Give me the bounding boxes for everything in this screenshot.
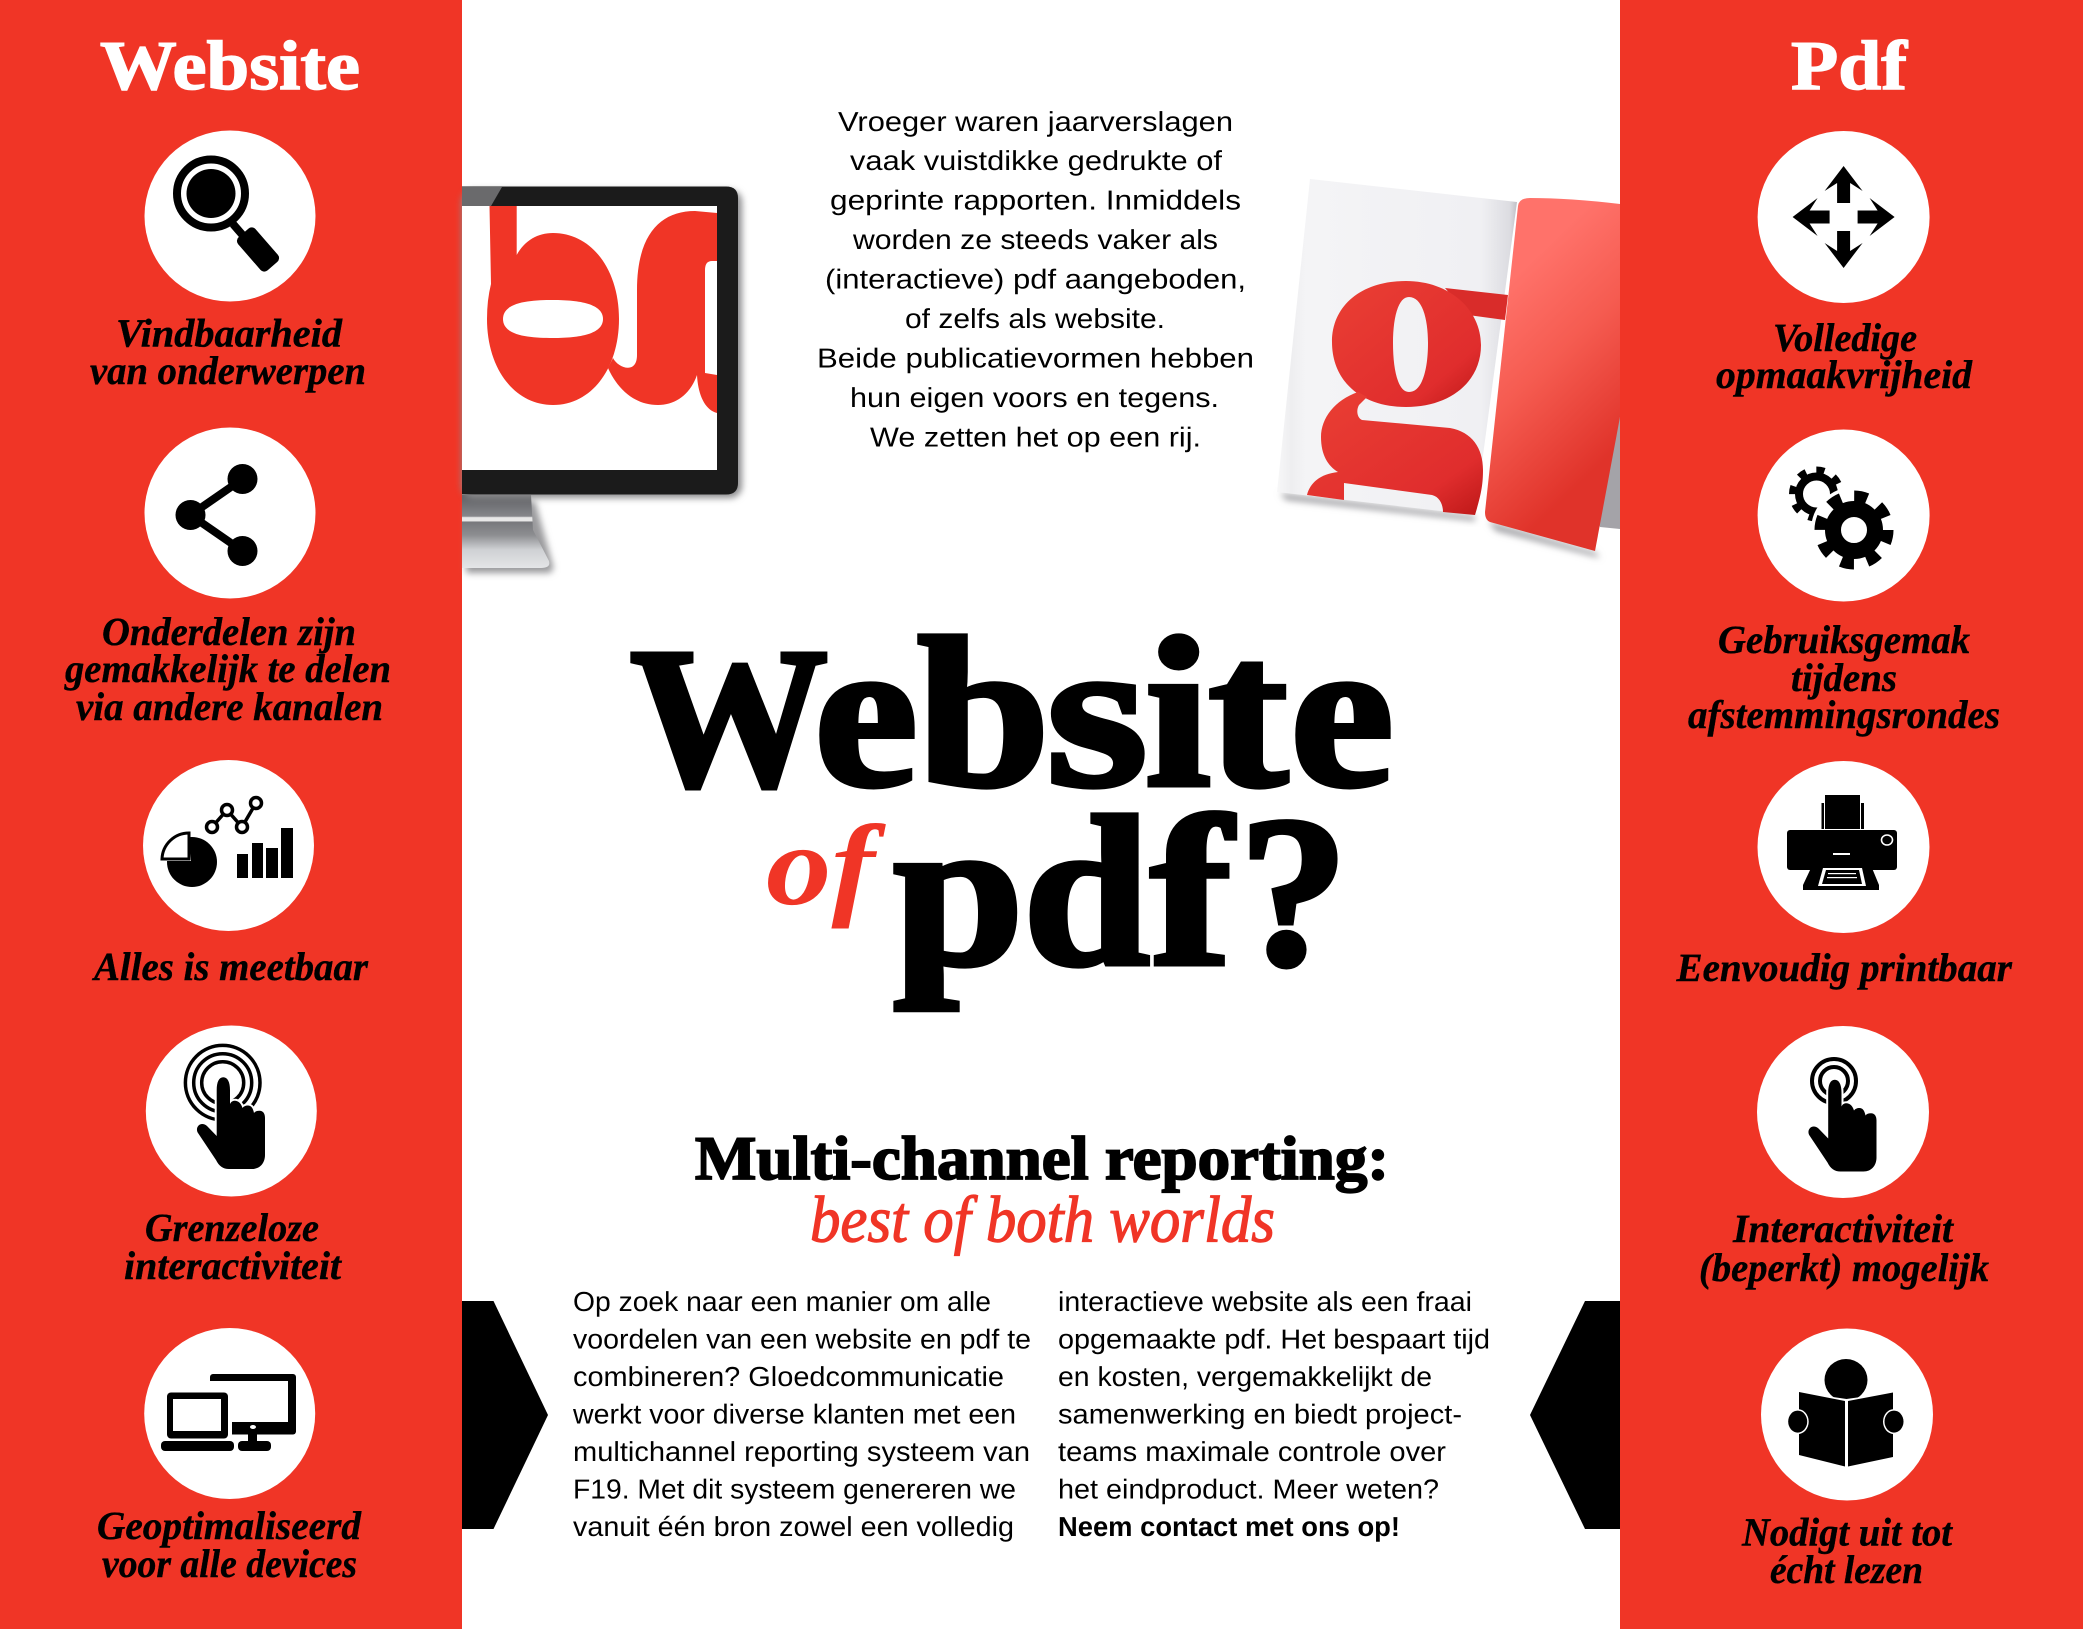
intro text: geprinte rapporten. Inmiddels <box>830 184 1241 216</box>
icon: reader <box>1787 1359 1905 1466</box>
label: afstemmingsrondes <box>1688 692 2000 737</box>
icon: four arrows <box>1793 166 1895 268</box>
arrow: right chevron <box>1530 1301 1620 1529</box>
title line: Website: s <box>1046 593 1148 832</box>
heading: Pdf: Pdf <box>1791 28 1908 105</box>
item: beperkte interactiviteit <box>1699 1026 1989 1290</box>
label <box>1716 315 1973 397</box>
label: tijdens <box>1791 655 1897 700</box>
label: (beperkt) mogelijk <box>1699 1245 1989 1290</box>
image: desktop monitor <box>462 186 742 573</box>
label <box>1699 1206 1989 1290</box>
item: printbaar <box>1676 761 2012 990</box>
body text: column 1: F19. Met dit systeem genereren we <box>573 1474 1016 1504</box>
subheading <box>695 1125 1389 1256</box>
intro text: Beide publicatievormen hebben <box>817 342 1254 374</box>
arrow: left chevron <box>462 1301 548 1529</box>
label <box>124 1205 343 1288</box>
panel: pdf <box>1620 0 2083 1629</box>
icon: share <box>176 464 258 566</box>
label: gemakkelijk te delen <box>64 646 391 691</box>
title line: Website: e <box>1290 593 1394 832</box>
label: interactiviteit <box>124 1243 343 1288</box>
title line: pdf?: f <box>1150 772 1235 1011</box>
title line: pdf?: d <box>1023 772 1150 1011</box>
item: lezen <box>1741 1328 1954 1592</box>
panel: website <box>0 0 462 1629</box>
icon: gears <box>1793 470 1897 573</box>
heading: Website: Website <box>100 28 360 105</box>
body text: column 2: samenwerking en biedt project- <box>1058 1398 1462 1430</box>
title line: Website: t <box>1208 593 1288 832</box>
title line: Website: W <box>630 608 828 829</box>
title line: Website: b <box>917 593 1050 832</box>
label: Interactiviteit <box>1732 1206 1955 1251</box>
icon: touch hand <box>1808 1059 1876 1172</box>
intro text: worden ze steeds vaker als <box>852 224 1218 255</box>
body text: column 2: interactieve website als een fraai <box>1058 1286 1472 1317</box>
body text: column 1 <box>572 1286 1031 1542</box>
body text: column 2: en kosten, vergemakkelijkt de <box>1058 1361 1432 1392</box>
main title <box>630 593 1394 1011</box>
body text: column 2 <box>1058 1286 1490 1542</box>
label: Geoptimaliseerd <box>97 1503 362 1548</box>
image: open magazine <box>1277 179 1620 558</box>
item: devices <box>97 1328 362 1586</box>
label: Alles is meetbaar <box>91 944 368 989</box>
label: Onderdelen zijn <box>102 609 356 654</box>
intro text <box>817 106 1254 452</box>
letter g on page <box>1307 281 1508 515</box>
label <box>64 609 391 729</box>
body text: column 2: opgemaakte pdf. Het bespaart tijd <box>1058 1324 1490 1354</box>
subheading accent: best of both worlds <box>810 1184 1275 1256</box>
body text: column 2: Neem contact met ons op! <box>1058 1511 1400 1542</box>
title line: pdf?: p <box>893 772 1024 1011</box>
label: Gebruiksgemak <box>1718 617 1970 662</box>
label <box>97 1503 362 1586</box>
label: via andere kanalen <box>76 684 383 729</box>
intro text: hun eigen voors en tegens. <box>850 382 1219 413</box>
body text: column 1: werkt voor diverse klanten met een <box>572 1398 1016 1430</box>
label <box>90 310 366 393</box>
label: van onderwerpen <box>90 348 366 393</box>
body text: column 1: voordelen van een website en pdf te <box>573 1324 1031 1354</box>
title line: Website: i <box>1145 593 1211 832</box>
icon: charts <box>160 798 293 887</box>
label: Vindbaarheid <box>116 310 343 356</box>
body text: column 1: multichannel reporting systeem van <box>573 1436 1030 1467</box>
intro text: vaak vuistdikke gedrukte of <box>850 145 1222 176</box>
body text: column 1: combineren? Gloedcommunicatie <box>573 1361 1004 1392</box>
item: meetbaar <box>91 760 368 989</box>
item: vindbaarheid <box>90 130 366 393</box>
icon: laptop and monitor <box>161 1374 296 1451</box>
icon: printer <box>1787 795 1897 890</box>
subheading: Multi-channel reporting: <box>695 1125 1389 1193</box>
title word: of: of <box>766 802 886 929</box>
intro text: Vroeger waren jaarverslagen <box>838 106 1233 137</box>
label: Grenzeloze <box>145 1205 319 1250</box>
body text: column 1: Op zoek naar een manier om alle <box>573 1286 991 1317</box>
body text: column 2: het eindproduct. Meer weten? <box>1058 1474 1439 1504</box>
intro text: (interactieve) pdf aangeboden, <box>825 264 1246 294</box>
item: delen <box>64 428 391 729</box>
item: opmaakvrijheid <box>1716 131 1973 397</box>
label: voor alle devices <box>102 1541 357 1586</box>
intro text: of zelfs als website. <box>905 303 1165 334</box>
red letters on screen <box>487 206 717 413</box>
label: écht lezen <box>1770 1547 1923 1592</box>
label: Eenvoudig printbaar <box>1676 945 2012 990</box>
label: opmaakvrijheid <box>1716 352 1973 397</box>
label <box>1741 1510 1954 1592</box>
label <box>1688 617 2000 737</box>
item: interactiviteit <box>124 1026 343 1288</box>
label: Volledige <box>1773 315 1917 360</box>
intro text: We zetten het op een rij. <box>870 422 1201 452</box>
label: Nodigt uit tot <box>1741 1510 1954 1554</box>
icon: touch hand with rings <box>185 1045 265 1169</box>
title line: Website: e <box>814 593 918 832</box>
item: gebruiksgemak <box>1688 430 2000 737</box>
body text: column 2: teams maximale controle over <box>1058 1436 1446 1467</box>
title line: pdf?: ? <box>1239 772 1348 1011</box>
icon: magnifier <box>177 160 281 274</box>
body text: column 1: vanuit één bron zowel een volledig <box>573 1511 1014 1542</box>
